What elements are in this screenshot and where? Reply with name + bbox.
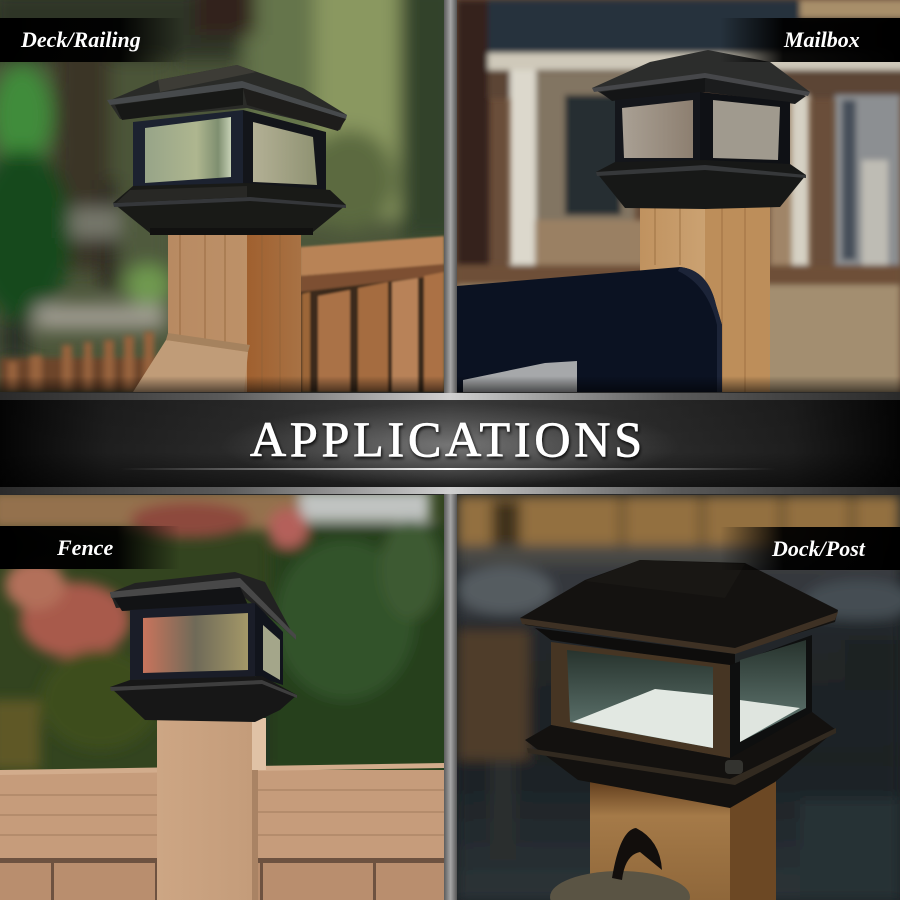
label: Fence: Fence — [56, 535, 113, 560]
panel: mailbox photo — [457, 0, 900, 395]
label: Dock/Post — [720, 527, 900, 570]
vertical divider bottom — [444, 494, 457, 900]
wood post — [590, 780, 776, 900]
vinyl fence — [0, 763, 444, 900]
solar post cap lamp — [110, 572, 297, 722]
label: Dock/Post: Dock/Post — [771, 536, 866, 561]
vertical divider top — [444, 0, 457, 393]
panel: deck/railing photo — [0, 0, 460, 392]
label: Mailbox: Mailbox — [783, 27, 860, 52]
title banner — [0, 393, 900, 494]
wood post — [157, 718, 266, 900]
label: Fence — [0, 526, 180, 569]
label: Mailbox — [720, 18, 900, 62]
solar post cap lamp — [107, 65, 347, 235]
wood post — [133, 230, 301, 392]
mailbox — [457, 267, 722, 392]
panel: dock/post photo — [457, 495, 900, 900]
rope — [550, 828, 690, 900]
panel: fence photo — [0, 490, 460, 900]
label: Deck/Railing: Deck/Railing — [20, 27, 141, 52]
label: Deck/Railing — [0, 18, 185, 62]
railing — [301, 277, 424, 392]
wood post — [640, 200, 770, 392]
solar post cap lamp — [592, 50, 810, 209]
title: APPLICATIONS: APPLICATIONS — [250, 411, 642, 467]
solar post cap lamp — [520, 560, 838, 808]
